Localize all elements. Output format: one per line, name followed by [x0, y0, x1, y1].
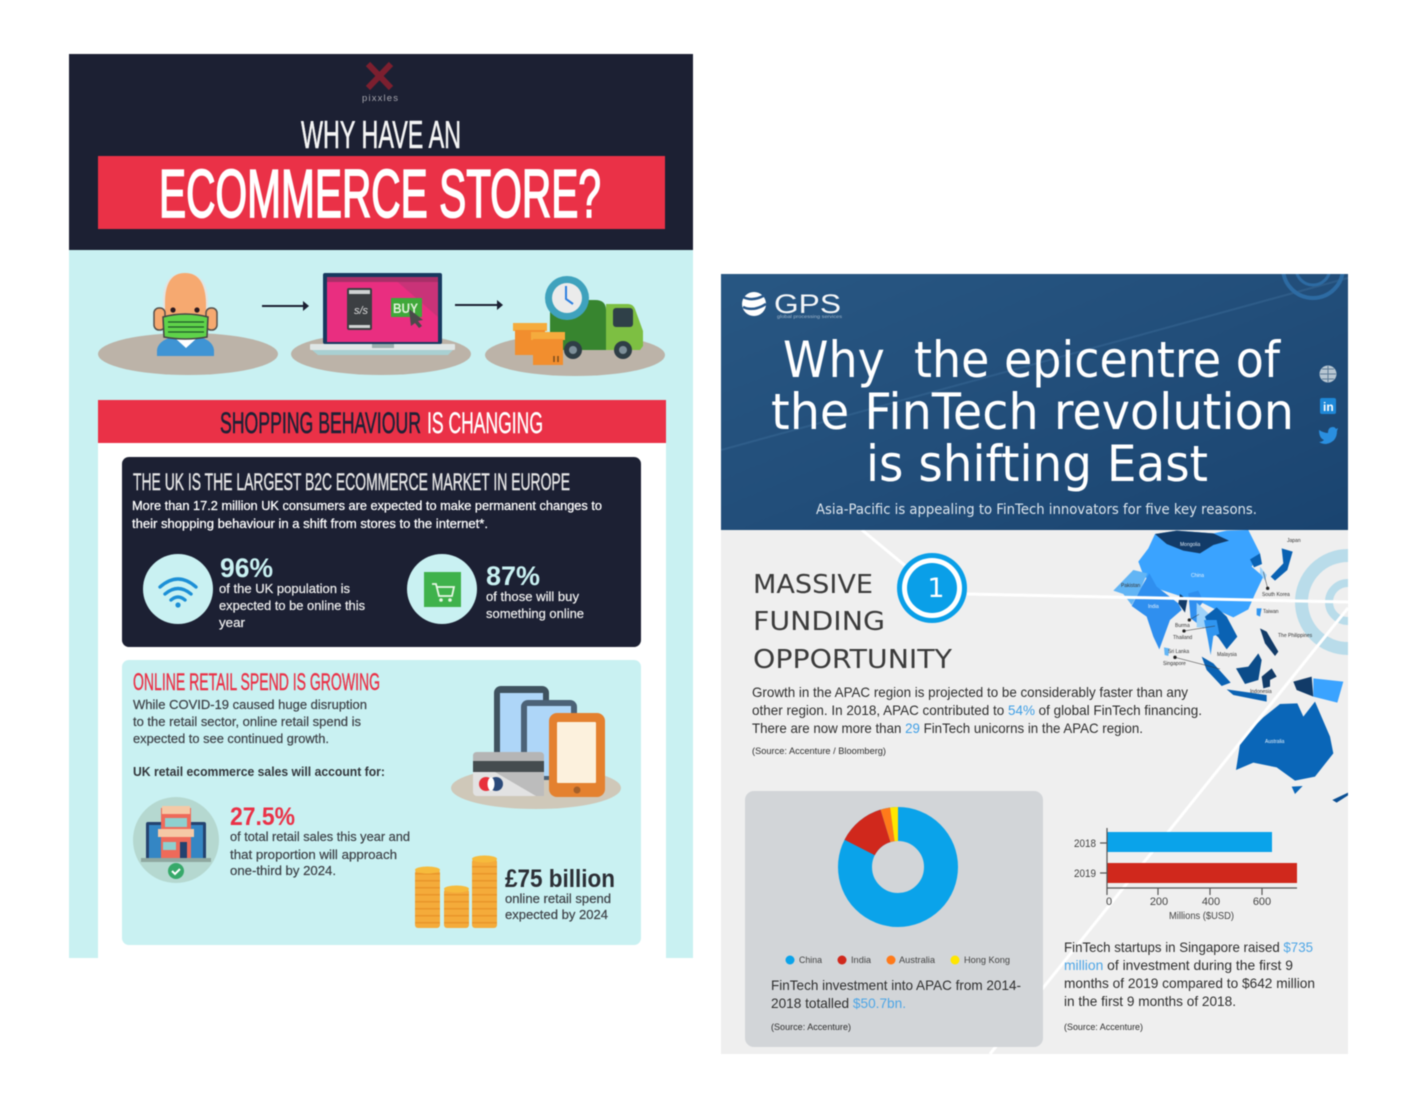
stat: 27.5 percent: of total retail sales this year and: [230, 829, 410, 844]
stat: 87 percent buy online: something online: [486, 606, 584, 621]
heading: massive funding opportunity: MASSIVE: [753, 570, 873, 600]
heading: fintech revolution: [771, 331, 1294, 493]
header: fintech title: [720, 273, 1349, 531]
bar chart: Singapore funding: 400: [1202, 896, 1220, 908]
text: APAC growth: Growth in the APAC region is projected to be considerably faster than any: [752, 684, 1188, 700]
subtitle: Asia-Pacific is appealing to FinTech innovators for five key reasons.: [816, 502, 1257, 518]
map labels: Taiwan: [1263, 609, 1279, 615]
map labels: Indonesia: [1250, 689, 1272, 695]
bar chart: Singapore funding: 2019: [1074, 868, 1096, 880]
text: retail intro: While COVID-19 caused huge disruption: [133, 697, 367, 712]
heading: UK market: THE UK IS THE LARGEST B2C ECOMMERCE MARKET IN EUROPE: [133, 469, 570, 496]
panel: APAC investment donut: [745, 791, 1043, 1047]
legend: Hong Kong: [964, 955, 1010, 966]
map labels: Sri Lanka: [1168, 649, 1189, 655]
section banner: shopping behaviour is changing: SHOPPING BEHAVIOUR: [220, 407, 421, 440]
panel: fintech infographic: [720, 273, 1349, 1054]
logo: GPS: global processing services: [777, 314, 843, 319]
heading: fintech revolution: Why the epicentre of: [783, 331, 1281, 389]
stat: 87 percent buy online: [486, 561, 584, 621]
source: Accenture: (Source: Accenture): [771, 1022, 851, 1032]
bar chart: Singapore funding: Millions ($USD): [1169, 910, 1234, 922]
text: Singapore startups: months of 2019 compared to $642 million: [1064, 975, 1315, 991]
map labels: Burma: [1175, 623, 1190, 629]
stat: 96 percent online: of the UK population is: [219, 581, 350, 596]
map labels: Mongolia: [1180, 542, 1201, 548]
icon: devices and card: [451, 686, 621, 809]
text: retail intro: to the retail sector, online retail spend is: [133, 714, 361, 729]
text: APAC growth: There are now more than 29 FinTech unicorns in the APAC region.: [752, 720, 1143, 736]
text: Singapore startups: in the first 9 months of 2018.: [1064, 993, 1236, 1009]
heading: massive funding opportunity: FUNDING: [753, 607, 885, 637]
stat: 27.5 percent: that proportion will approach: [230, 847, 397, 862]
stat: 75 billion pounds: [505, 865, 615, 922]
logo: GPS: GPS: [774, 289, 841, 319]
map labels: The Philippines: [1278, 633, 1313, 639]
icon: linkedin: in: [1323, 400, 1334, 414]
legend: Australia: [899, 955, 936, 966]
heading: massive funding opportunity: OPPORTUNITY: [753, 645, 952, 675]
text: APAC growth: other region. In 2018, APAC contributed to 54% of global FinTech financing.: [752, 702, 1202, 718]
text: investment total: [771, 977, 1021, 1011]
icon: linkedin: [1320, 398, 1336, 414]
legend: China: [799, 955, 823, 966]
stat: 87 percent buy online: 87%: [486, 561, 540, 591]
icon: website globe: [1320, 366, 1336, 382]
text: Singapore startups: [1064, 939, 1315, 1009]
logo: pixxles: pixxles: [362, 93, 398, 104]
stat: 75 billion pounds: expected by 2024: [505, 907, 608, 922]
bar chart: Singapore funding: [1074, 828, 1297, 922]
header: ecommerce store: [69, 54, 693, 250]
source: Accenture and Bloomberg: (Source: Accenture / Bloomberg): [752, 746, 886, 756]
text: Singapore startups: FinTech startups in Singapore raised $735: [1064, 939, 1313, 955]
map labels: [1121, 538, 1313, 745]
map labels: Singapore: [1163, 661, 1186, 667]
text: APAC growth: [752, 684, 1202, 736]
heading: fintech revolution: is shifting East: [866, 435, 1208, 493]
stat: 75 billion pounds: online retail spend: [505, 891, 611, 906]
text: shopping behaviour summary: More than 17.2 million UK consumers are expected to make permanent changes to: [132, 498, 602, 513]
map labels: Malaysia: [1217, 652, 1237, 658]
panel: ecommerce infographic: [69, 54, 693, 958]
map labels: Japan: [1287, 538, 1301, 544]
icon: person wearing mask: [98, 273, 278, 375]
logo: pixxles: [362, 64, 398, 104]
icon: laptop with buy button: s/s: [354, 305, 369, 317]
stat: 96 percent online: [219, 553, 365, 630]
map: Asia-Pacific: [1113, 530, 1348, 803]
legend: India: [851, 955, 872, 966]
badge: number 1: 1: [927, 573, 945, 604]
title banner: ecommerce store: [98, 156, 665, 232]
icon: online store on laptop: [133, 797, 219, 883]
text: Singapore startups: million of investment during the first 9: [1064, 957, 1293, 973]
rings: [1294, 548, 1348, 656]
stat: 96 percent online: 96%: [220, 553, 273, 583]
stat: 27.5 percent: one-third by 2024.: [230, 863, 336, 878]
icon: shopping cart: [407, 554, 477, 624]
map labels: Australia: [1265, 739, 1285, 745]
heading: online retail spend: ONLINE RETAIL SPEND IS GROWING: [133, 669, 380, 696]
white connector lines: [862, 530, 1348, 1054]
section banner: shopping behaviour is changing: [98, 400, 666, 443]
icon: laptop with buy button: [291, 273, 471, 375]
heading: fintech revolution: the FinTech revolution: [771, 383, 1294, 441]
text: sales lead-in: UK retail ecommerce sales will account for:: [133, 764, 385, 779]
heading: massive funding opportunity: [753, 570, 952, 675]
text: shopping behaviour summary: [132, 498, 602, 531]
title banner: ecommerce store: ECOMMERCE STORE?: [159, 156, 601, 232]
icon: twitter: [1319, 427, 1338, 444]
panel: online retail spend: [122, 660, 641, 945]
bar chart: Singapore funding: 600: [1253, 896, 1271, 908]
text: retail intro: expected to see continued growth.: [133, 731, 329, 746]
stat: 27.5 percent: [230, 803, 410, 878]
bar chart: Singapore funding: 2018: [1074, 838, 1096, 850]
icon: wifi: [143, 554, 213, 624]
legend: [786, 955, 1010, 966]
donut chart: [855, 824, 941, 910]
map labels: South Korea: [1262, 592, 1290, 598]
map labels: India: [1148, 604, 1159, 610]
heading: why have an: WHY HAVE AN: [301, 114, 461, 157]
logo: GPS: [742, 289, 843, 319]
stat: 96 percent online: year: [219, 615, 246, 630]
text: retail intro: [133, 697, 367, 746]
source: Accenture right column: (Source: Accenture): [1064, 1022, 1143, 1032]
stat: 96 percent online: expected to be online this: [219, 598, 365, 613]
bar chart: Singapore funding: 0: [1106, 896, 1112, 908]
icon: delivery truck with clock: [485, 276, 665, 376]
map labels: Thailand: [1173, 635, 1192, 641]
text: investment total: 2018 totalled $50.7bn.: [771, 995, 906, 1011]
stat: 27.5 percent: 27.5%: [230, 803, 295, 831]
panel: UK largest B2C ecommerce market: [122, 457, 641, 647]
stat: 75 billion pounds: £75 billion: [505, 865, 615, 893]
section banner: shopping behaviour is changing: IS CHANGING: [427, 407, 543, 440]
bar chart: Singapore funding: 200: [1150, 896, 1168, 908]
badge: number 1: [897, 553, 967, 623]
stat: 87 percent buy online: of those will buy: [486, 589, 579, 604]
map labels: China: [1191, 573, 1204, 579]
text: shopping behaviour summary: their shopping behaviour in a shift from stores to the internet*.: [132, 516, 488, 531]
icon: laptop with buy button: BUY: [393, 300, 419, 316]
text: investment total: FinTech investment into APAC from 2014-: [771, 977, 1021, 993]
arrow: person to laptop: [262, 301, 309, 311]
icon: coin stacks: [415, 856, 497, 928]
map labels: Pakistan: [1121, 583, 1140, 589]
arrow: laptop to truck: [455, 300, 503, 310]
